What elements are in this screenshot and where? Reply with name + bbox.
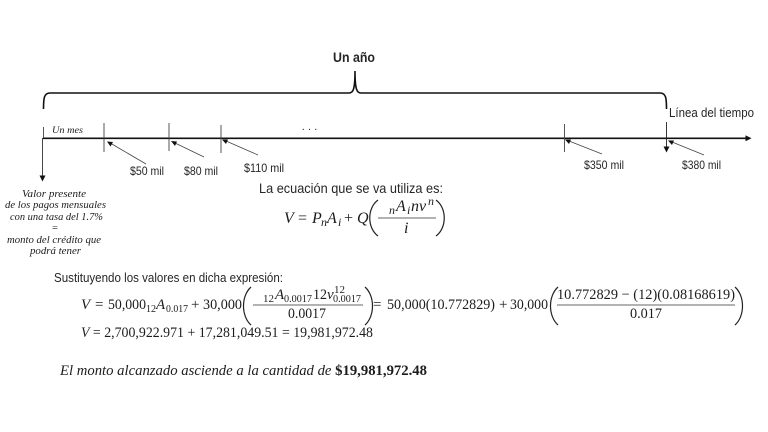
- payment labels: $380 mil: [682, 158, 721, 172]
- present value arrow: [42, 138, 44, 176]
- general equation: Q: [357, 210, 369, 227]
- title: Un año: Un año: [333, 50, 375, 65]
- final tick with arrow: [666, 122, 668, 147]
- month ticks: [44, 123, 564, 153]
- general equation: A: [395, 198, 406, 215]
- present value note: [5, 189, 106, 257]
- year brace: [44, 71, 666, 109]
- payment labels: $110 mil: [244, 161, 284, 175]
- present value note: de los pagos mensuales: [5, 200, 106, 211]
- substitution heading: Sustituyendo los valores en dicha expresión:: [54, 271, 283, 285]
- present value note: podrá tener: [29, 246, 82, 257]
- general equation: V: [284, 210, 296, 227]
- substituted equation: =: [373, 297, 381, 313]
- payment labels: $350 mil: [584, 158, 624, 172]
- label: Un mes: Un mes: [52, 126, 83, 136]
- payment arrows: [107, 140, 704, 164]
- substituted equation: V: [81, 297, 92, 313]
- substituted equation: 30,000: [203, 297, 242, 313]
- payment labels: $50 mil: [130, 164, 164, 178]
- equation heading: La ecuación que se va utiliza es:: [259, 180, 443, 196]
- label: Línea del tiempo: Línea del tiempo: [669, 106, 754, 120]
- main axis arrow: [43, 137, 746, 139]
- substituted equation: 12: [334, 285, 345, 296]
- present value note: con una tasa del 1.7%: [10, 212, 103, 223]
- general equation: P: [311, 210, 322, 227]
- conclusion: El monto alcanzado asciende a la cantidad de $19,981,972.48: [59, 363, 427, 379]
- substituted equation: +: [499, 297, 507, 313]
- result equation: V = 2,700,922.971 + 17,281,049.51 = 19,981,972.48: [81, 325, 373, 341]
- substituted equation: 10.772829 − (12)(0.08168619): [557, 287, 735, 303]
- general equation: =: [298, 210, 307, 227]
- substituted equation: 12: [146, 304, 156, 315]
- substituted equation: =: [95, 297, 103, 313]
- substituted equation: 0.0017: [333, 294, 361, 305]
- substituted equation: 30,000: [510, 297, 548, 313]
- general equation: A: [326, 210, 337, 227]
- ellipsis: . . .: [302, 122, 317, 133]
- substituted equation: 12: [313, 287, 327, 303]
- substituted equation: [81, 285, 742, 325]
- substituted equation: v: [327, 287, 334, 303]
- present value note: =: [52, 223, 58, 234]
- substituted equation: 0.0017: [284, 294, 312, 305]
- general equation: i: [407, 203, 410, 217]
- substituted equation: 0.0017: [288, 306, 326, 322]
- substituted equation: 0.017: [166, 304, 188, 315]
- general equation: nv: [411, 198, 427, 215]
- general equation: n: [389, 203, 395, 217]
- substituted equation: +: [191, 297, 199, 313]
- general equation: [284, 194, 444, 237]
- substituted equation: 50,000: [108, 297, 146, 313]
- general equation: n: [428, 194, 434, 208]
- general equation: +: [344, 210, 353, 227]
- payment labels: $80 mil: [184, 164, 218, 178]
- substituted equation: 50,000(10.772829): [387, 297, 495, 313]
- substituted equation: A: [155, 297, 166, 313]
- general equation: n: [321, 215, 327, 229]
- present value note: Valor presente: [22, 189, 86, 200]
- substituted equation: 12: [263, 294, 274, 305]
- payment labels: [130, 158, 721, 178]
- substituted equation: 0.017: [630, 306, 662, 322]
- general equation: i: [404, 220, 408, 237]
- general equation: i: [338, 215, 341, 229]
- present value note: monto del crédito que: [7, 235, 101, 246]
- timeline: [43, 122, 746, 153]
- substituted equation: A: [274, 287, 285, 303]
